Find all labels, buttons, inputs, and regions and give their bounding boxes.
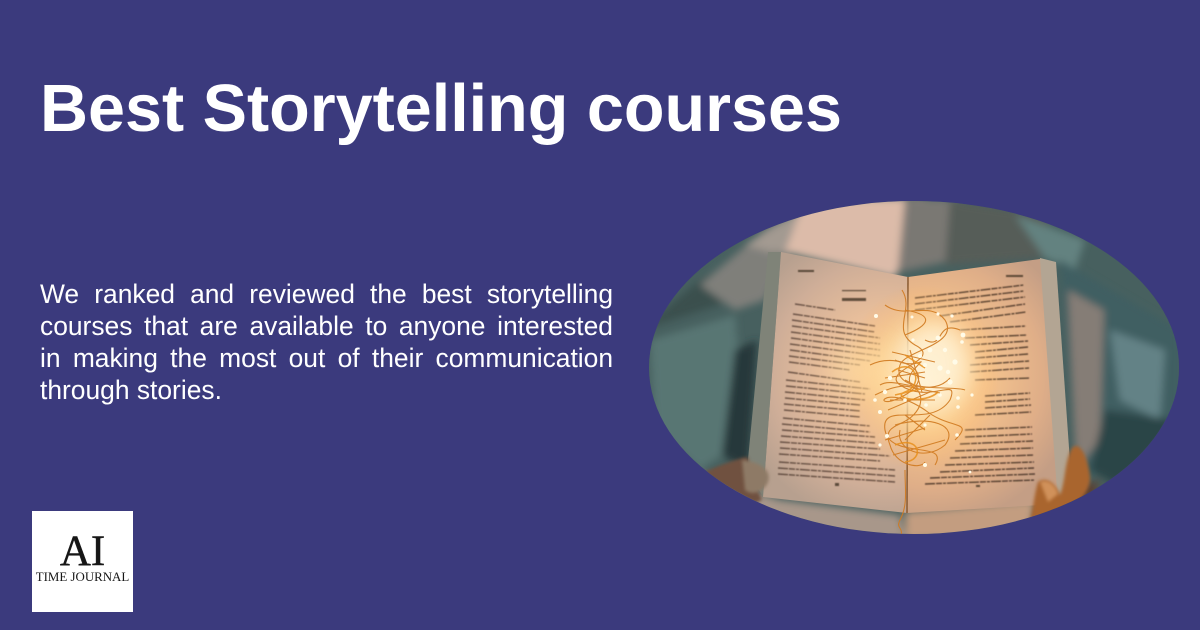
logo wordmark: TIME JOURNAL: [36, 570, 129, 584]
fairy lights: [830, 284, 1000, 540]
left page lines of print: [778, 304, 895, 482]
open book: [747, 252, 1070, 513]
description text block: through stories.: [40, 375, 222, 405]
logo: AI Time Journal: [32, 511, 133, 612]
bedding background: [640, 190, 1200, 540]
book page numbers and running heads: [798, 270, 1023, 487]
logo letters: AI: [60, 528, 105, 575]
title: Best Storytelling courses: [40, 72, 842, 146]
left hand: [706, 456, 770, 503]
right hand: [1028, 444, 1092, 518]
description text block: courses that are available to anyone interested: [40, 311, 613, 341]
gutter: [907, 277, 908, 513]
description text block: We ranked and reviewed the best storytelling: [40, 279, 613, 309]
oval illustration: open book with fairy lights: [649, 201, 1179, 534]
right page lines of print: [915, 285, 1035, 484]
left page: [763, 252, 908, 513]
right page: [907, 259, 1058, 513]
description text block: [40, 279, 613, 405]
description text block: in making the most out of their communication: [40, 343, 613, 373]
